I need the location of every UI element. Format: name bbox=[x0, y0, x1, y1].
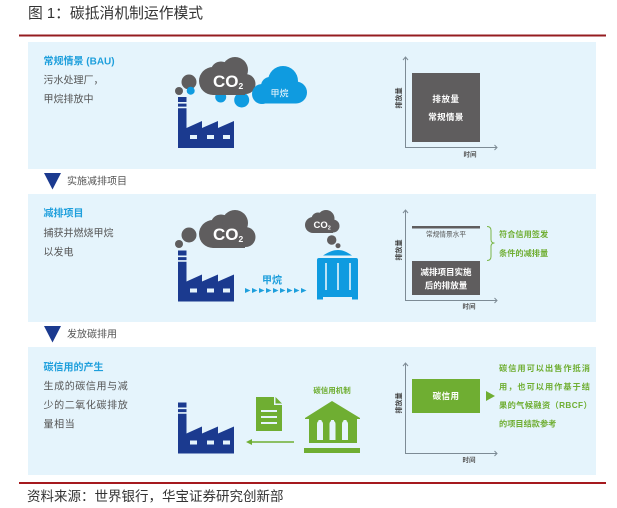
icon: CO2 cloud: 2 bbox=[238, 234, 244, 244]
arrow: credits to factory bbox=[246, 439, 294, 445]
divider: implement project bbox=[44, 173, 127, 190]
divider: issue credits bbox=[44, 326, 117, 342]
divider: implement project: 实施减排项目 bbox=[67, 174, 127, 188]
label: methane flow: 甲烷 bbox=[262, 274, 282, 286]
chart: reduced emissions: 时间 bbox=[462, 302, 476, 310]
icon: credit document bbox=[256, 397, 282, 431]
panel 3 text: 量相当 bbox=[44, 418, 75, 430]
panel 2 text: 减排项目 bbox=[44, 206, 84, 220]
callout: eligible reductions bbox=[499, 229, 549, 258]
panel 3 text: 碳信用的产生 bbox=[44, 360, 104, 374]
brace bbox=[487, 226, 494, 260]
icon: smoke bubbles bbox=[175, 74, 249, 108]
panel: carbon credit generation bbox=[28, 347, 596, 475]
icon: small CO2 cloud: CO bbox=[314, 220, 328, 231]
icon: factory bbox=[178, 402, 234, 454]
chart: reduced emissions: 减排项目实施 bbox=[420, 267, 472, 277]
callout: eligible reductions: 条件的减排量 bbox=[499, 248, 548, 258]
icon: factory bbox=[178, 97, 234, 148]
icon: CO2 cloud: CO bbox=[213, 225, 238, 244]
label: credit mechanism: 碳信用机制 bbox=[313, 385, 351, 395]
top rule bbox=[19, 34, 606, 36]
chart: carbon credits bbox=[394, 363, 497, 464]
icon: CO2 cloud bbox=[199, 210, 256, 248]
panel 2 text: 以发电 bbox=[44, 246, 74, 258]
icon: CO2 cloud: CO bbox=[213, 72, 238, 91]
icon: generator tank bbox=[317, 250, 358, 300]
panel: emission reduction project bbox=[28, 194, 596, 322]
arrow: green triangle bbox=[486, 391, 495, 401]
icon: small smoke bubbles bbox=[327, 235, 340, 248]
icon: methane cloud bbox=[252, 66, 307, 104]
divider: issue credits: 发放碳排用 bbox=[67, 328, 117, 340]
icon: institution building bbox=[304, 401, 360, 453]
callout: credit use: 的项目结款参考 bbox=[499, 418, 556, 428]
callout: credit use bbox=[499, 363, 592, 428]
label: methane flow bbox=[245, 274, 306, 293]
chart: reduced emissions: 排放量 bbox=[394, 240, 403, 260]
source note: 资料来源：世界银行，华宝证券研究创新部 bbox=[27, 489, 284, 504]
chart: carbon credits: 时间 bbox=[462, 455, 476, 464]
panel 1 text bbox=[44, 54, 115, 106]
chart: emissions baseline: 排放量 bbox=[394, 88, 403, 108]
bottom rule bbox=[19, 482, 606, 484]
icon: small CO2 cloud: 2 bbox=[328, 226, 331, 232]
chart: carbon credits: 排放量 bbox=[394, 392, 403, 414]
panel 1 text: 常规情景 (BAU) bbox=[44, 54, 115, 68]
panel 3 text: 生成的碳信用与减 bbox=[44, 380, 128, 392]
panel: business as usual bbox=[28, 42, 596, 169]
chart: emissions baseline bbox=[394, 57, 497, 158]
callout: credit use: 用，也可以用作基于结 bbox=[499, 382, 591, 392]
panel 3 text: 少的二氧化碳排放 bbox=[44, 398, 128, 412]
chart: emissions baseline: 排放量 bbox=[432, 94, 460, 104]
panel 1 text: 污水处理厂， bbox=[44, 74, 104, 86]
icon: methane cloud: 甲烷 bbox=[270, 88, 289, 98]
icon: CO2 cloud: 2 bbox=[238, 81, 244, 91]
title: 图 1：碳抵消机制运作模式 bbox=[28, 5, 203, 22]
chart: emissions baseline: 时间 bbox=[464, 150, 477, 158]
callout: credit use: 碳信用可以出售作抵消 bbox=[499, 363, 591, 373]
icon: small CO2 cloud bbox=[305, 210, 340, 233]
chart: reduced emissions: 后的排放量 bbox=[425, 280, 468, 290]
panel 3 text bbox=[44, 360, 128, 430]
icon: factory bbox=[178, 250, 234, 302]
panel 2 text: 捕获并燃烧甲烷 bbox=[44, 226, 114, 240]
icon: smoke bubbles bbox=[175, 228, 196, 248]
chart: reduced emissions: 常规情景水平 bbox=[426, 230, 466, 238]
chart: emissions baseline: 常规情景 bbox=[428, 112, 464, 122]
chart: reduced emissions bbox=[394, 210, 497, 310]
panel 1 text: 甲烷排放中 bbox=[44, 92, 94, 106]
callout: eligible reductions: 符合信用签发 bbox=[499, 229, 549, 239]
icon: CO2 cloud bbox=[199, 57, 256, 95]
panel 2 text bbox=[44, 206, 114, 258]
callout: credit use: 果的气候融资（RBCF） bbox=[499, 400, 592, 410]
chart: carbon credits: 碳信用 bbox=[433, 391, 459, 401]
